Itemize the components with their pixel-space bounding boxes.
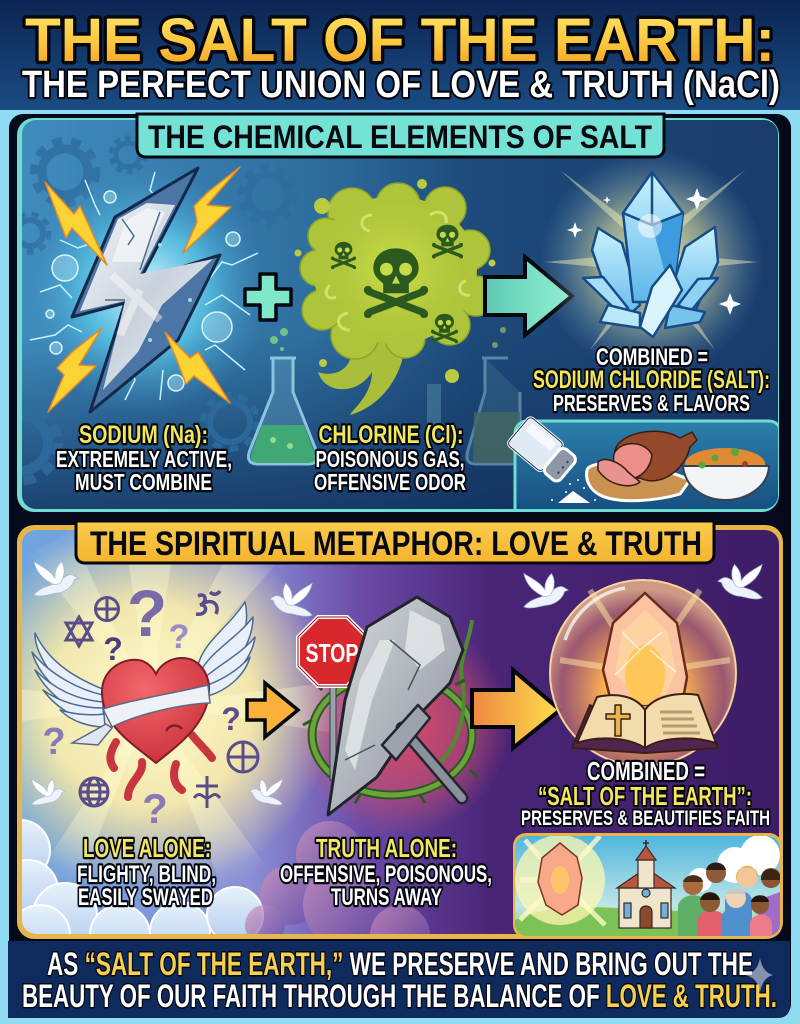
panel: chemical elements [0,114,781,521]
icon: winged blindfolded heart [32,602,255,797]
icon: love symbols: ? [42,721,66,763]
label: chlorine: OFFENSIVE ODOR [314,469,466,495]
label: sodium: MUST COMBINE [75,469,212,495]
icon: love symbols: ? [103,631,123,667]
label: truth alone: TRUTH ALONE: [316,833,457,863]
label: salt of the earth: COMBINED = [587,756,705,786]
icon: lightning bolts [45,167,240,412]
icon: small skull left [331,242,356,269]
icon: small gem [538,843,582,915]
label: love alone [77,833,216,911]
label: sodium chloride [533,344,770,416]
sub-panel: church and community [513,833,782,938]
icon: rice bowl [683,448,769,500]
arrow: small orange [247,683,298,737]
icon: main skull [364,248,428,318]
title: THE SALT OF THE EARTH: [25,6,775,74]
arrow: chemical result [485,257,572,335]
panel: spiritual metaphor [17,520,783,939]
icon: love symbols [42,576,258,832]
icon: love symbols: ? [142,785,168,832]
icon: dove top left [34,562,78,596]
gears backdrop [22,136,260,486]
icon: stone [328,597,463,815]
sub-panel: salt uses [514,420,778,509]
blindfold [103,685,210,727]
icon: stop sign [298,617,367,780]
icon: glowing crystal globe [550,580,736,766]
icon: people [678,862,781,936]
heading tab: spiritual metaphor: THE SPIRITUAL METAPHOR: LOVE & TRUTH [90,525,702,563]
bubbles [46,191,240,391]
label: sodium: SODIUM (Na): [79,421,208,449]
electric sparks [30,172,258,400]
left wing [32,633,105,727]
icon: small skull upper right [432,225,463,259]
icon: right flask and tube [427,327,520,464]
element: chlorine cloud [294,179,496,415]
right wing [198,602,255,696]
icon: love symbols: ? [221,701,241,737]
heart [102,658,209,763]
icon: open bible [572,694,718,753]
icon: salt pile [551,479,596,503]
element: sodium [20,165,270,415]
icon: dove bottom middle [249,779,283,805]
icon: sparkle mark [745,958,773,992]
heading tab: chemical elements: THE CHEMICAL ELEMENTS OF SALT [148,119,652,155]
icon: salt shaker [507,416,579,485]
label: chlorine [314,421,466,495]
label: truth alone: TURNS AWAY [331,884,442,911]
icon: salt crystal [545,158,758,367]
icon: plus [245,274,291,320]
sodium shard [72,168,220,412]
label: love alone: LOVE ALONE: [83,833,211,863]
label: love alone: EASILY SWAYED [78,884,213,911]
icon: left flask [248,328,318,464]
arms and legs [110,735,212,797]
icon: church [617,840,675,928]
label: love alone: FLIGHTY, BLIND, [77,861,216,888]
icon: love symbols: ? [169,618,189,656]
icon: roast meat [587,431,697,501]
label: sodium: EXTREMELY ACTIVE, [56,446,232,472]
label: sodium chloride: COMBINED = [596,344,708,371]
icon: thorn ring [303,620,484,803]
label: chlorine: CHLORINE (Cl): [318,421,464,449]
arrow: golden result [472,670,560,748]
icon: dove right left [524,574,568,608]
label: truth alone: OFFENSIVE, POISONOUS, [280,861,492,888]
label: truth alone [280,833,492,911]
icon: gavel [382,705,462,798]
icon: dove bottom left [31,779,65,805]
clouds: mauve [245,821,430,934]
icon: dove upper middle [270,583,312,616]
icon: small skull lower right [431,314,458,343]
icon: dove right top [718,565,762,599]
icon: love symbols: ? [127,576,167,650]
footer band [8,941,790,1018]
label: chlorine: POISONOUS GAS, [316,446,464,472]
label: sodium [56,421,232,495]
clouds: light [22,819,264,934]
header band [0,0,800,110]
title [22,6,780,106]
label: salt of the earth [521,756,770,830]
icon: stop sign: STOP [306,638,358,668]
